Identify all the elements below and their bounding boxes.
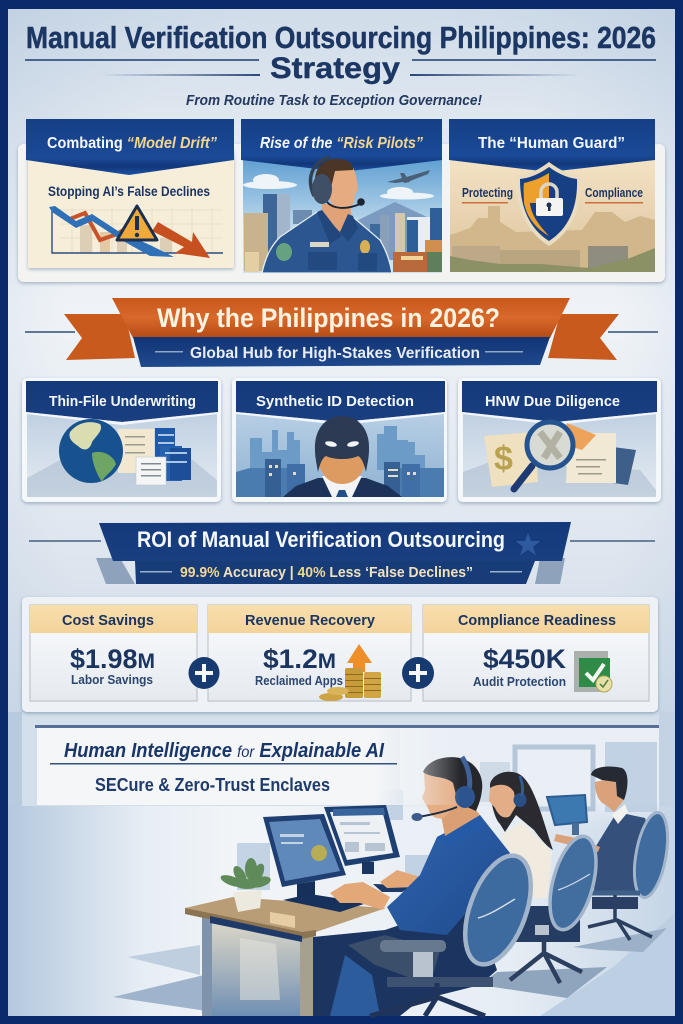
icon: plus 1 (188, 657, 220, 689)
card: synthetic id detection (232, 378, 447, 502)
card: human guard: Compliance (585, 186, 643, 200)
card: cost savings (30, 605, 197, 701)
card: revenue recovery (208, 605, 411, 701)
icon: green checklist (574, 651, 612, 692)
icon: warning (117, 206, 157, 240)
card: revenue recovery: Revenue Recovery (245, 612, 376, 629)
far man at desk (547, 766, 673, 940)
card: risk pilots: Rise of the “Risk Pilots” (260, 135, 423, 152)
subtitle: From Routine Task to Exception Governance! (186, 92, 482, 109)
illustration: office scene (8, 712, 675, 1016)
card: cost savings: $1.98M (70, 644, 155, 674)
panel: ROI values (22, 597, 658, 712)
card: risk pilots (241, 119, 442, 273)
text box: explainable AI: SECure & Zero-Trust Enclaves (95, 775, 330, 795)
icon: documents and magnifier: $ (494, 440, 513, 478)
card: revenue recovery: Reclaimed Apps (255, 673, 343, 688)
pilot figure (262, 157, 392, 273)
icon: documents and magnifier (484, 422, 636, 489)
icon: coins and arrow (319, 644, 381, 701)
woman (489, 772, 605, 983)
card: thin-file underwriting (22, 378, 221, 502)
banner: ROI: 99.9% Accuracy | 40% Less ‘False Declines” (180, 564, 473, 581)
card: compliance readiness: Compliance Readiness (458, 612, 616, 629)
clouds (243, 174, 434, 200)
card: human guard (449, 119, 655, 272)
skyline (244, 194, 442, 273)
panel: top strategies (18, 119, 665, 282)
card: model drift: Stopping AI’s False Declines (48, 183, 210, 199)
card: thin-file underwriting: Thin-File Underwriting (49, 394, 196, 410)
card: human guard: The “Human Guard” (478, 135, 625, 152)
card: model drift: Combating “Model Drift” (47, 135, 217, 152)
background building shapes (237, 742, 657, 890)
card: model drift (26, 119, 234, 268)
card: cost savings: Labor Savings (71, 672, 153, 687)
card: compliance readiness: $450K (483, 644, 567, 674)
card: synthetic id detection: Synthetic ID Detection (256, 393, 414, 410)
icon: plus 2 (402, 657, 434, 689)
icon: documents (118, 428, 191, 485)
card: HNW due diligence: HNW Due Diligence (485, 394, 620, 410)
banner: ROI (29, 522, 655, 584)
card: compliance readiness (423, 605, 649, 701)
banner: why the Philippines (25, 298, 658, 367)
icon: airplane (387, 170, 430, 183)
card: compliance readiness: Audit Protection (473, 674, 566, 689)
figure: masked agent (283, 416, 402, 497)
title: Strategy (270, 52, 400, 85)
title (25, 20, 656, 85)
text box: explainable AI: Human Intelligence for Explainable AI (64, 740, 384, 762)
banner: ROI: ROI of Manual Verification Outsourcing (137, 527, 505, 552)
card: HNW due diligence (458, 378, 661, 502)
icon: shield (516, 162, 581, 246)
icon: potted plant (219, 858, 272, 912)
card: human guard: Protecting (462, 186, 513, 200)
banner: why the Philippines: Global Hub for High-Stakes Verification (190, 345, 480, 362)
main operator (313, 757, 544, 1016)
floor (113, 913, 675, 1016)
skyline (236, 426, 444, 497)
card: cost savings: Cost Savings (62, 612, 154, 629)
icon: globe (59, 419, 123, 483)
skyline (450, 206, 655, 272)
banner: why the Philippines: Why the Philippines in 2026? (157, 303, 500, 333)
card: revenue recovery: $1.2M (263, 644, 336, 674)
chart: falling trend (49, 206, 223, 258)
text box: explainable AI (37, 728, 460, 805)
monitors (263, 805, 415, 912)
desk (185, 897, 386, 1016)
